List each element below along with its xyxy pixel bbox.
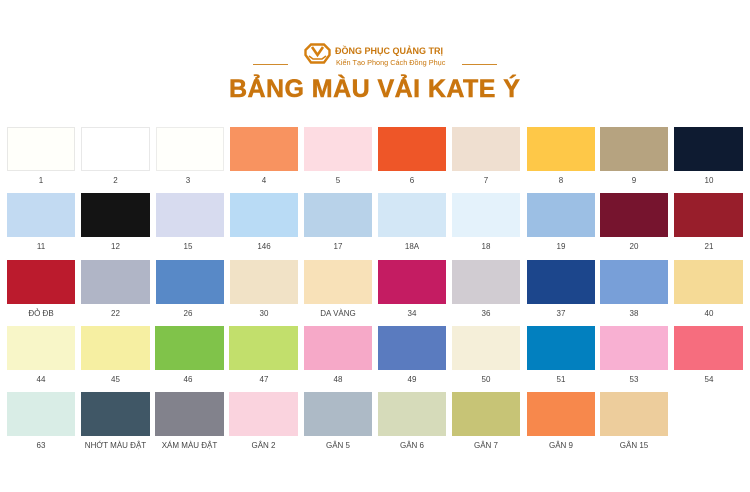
swatch 146 (230, 193, 298, 251)
swatch 21 (674, 193, 743, 251)
swatch 37 (527, 260, 595, 318)
brand tagline: Kiến Tạo Phong Cách Đồng Phục (336, 58, 445, 67)
swatch 44 (7, 326, 75, 384)
swatch DA VÀNG: DA VÀNG (320, 309, 356, 318)
swatch 38 (600, 260, 668, 318)
swatch 8 (527, 127, 595, 185)
swatch 18A: 18A (405, 242, 419, 251)
swatch 5: 5 (336, 176, 340, 185)
swatch XÁM MÀU ĐẬT: XÁM MÀU ĐẬT (162, 441, 217, 450)
swatch 45: 45 (111, 375, 120, 384)
swatch 10 (674, 127, 743, 185)
swatch GÂN 9: GÂN 9 (549, 441, 573, 450)
swatch 2 (81, 127, 150, 185)
swatch 63 (7, 392, 83, 454)
swatch 40: 40 (705, 309, 713, 318)
swatch 34 (378, 260, 446, 318)
swatch 11: 11 (37, 242, 45, 251)
swatch 47: 47 (260, 375, 268, 384)
swatch 26 (156, 260, 224, 318)
swatch GÂN 6 (378, 392, 454, 454)
swatch 36 (452, 260, 520, 318)
swatch 36: 36 (482, 309, 490, 318)
swatch 11 (7, 193, 75, 251)
swatch 30 (230, 260, 298, 318)
swatch 1 (7, 127, 75, 185)
swatch 3: 3 (186, 176, 190, 185)
swatch 18 (452, 193, 520, 251)
swatch 50: 50 (482, 375, 490, 384)
swatch GÂN 15: GÂN 15 (620, 441, 648, 450)
swatch 2: 2 (113, 176, 118, 185)
swatch 34: 34 (408, 309, 416, 318)
swatch 30: 30 (260, 309, 268, 318)
swatch NHỚT MÀU ĐẬT (81, 392, 157, 454)
brand name: ĐỒNG PHỤC QUẢNG TRỊ (335, 46, 443, 56)
swatch 44: 44 (37, 375, 45, 384)
swatch 22 (81, 260, 150, 318)
icon: brand logo (304, 43, 331, 64)
swatch 17: 17 (334, 242, 342, 251)
swatch 17 (304, 193, 372, 251)
swatch 4: 4 (262, 176, 266, 185)
swatch 10: 10 (705, 176, 713, 185)
swatch 9: 9 (632, 176, 636, 185)
swatch 51: 51 (557, 375, 565, 384)
swatch DA VÀNG (304, 260, 372, 318)
swatch ĐỎ ĐB: ĐỎ ĐB (28, 309, 54, 318)
swatch 19: 19 (557, 242, 565, 251)
title: BẢNG MÀU VẢI KATE Ý (229, 75, 520, 103)
swatch 45 (81, 326, 150, 384)
swatch 6: 6 (410, 176, 414, 185)
swatch 47 (229, 326, 298, 384)
swatch 49 (378, 326, 446, 384)
swatch GÂN 9 (527, 392, 603, 454)
swatch 19 (527, 193, 595, 251)
header rule left (253, 64, 288, 65)
swatch 53 (600, 326, 668, 384)
swatch 9 (600, 127, 668, 185)
swatch 15: 15 (184, 242, 192, 251)
swatch GÂN 5: GÂN 5 (326, 441, 350, 450)
swatch 20 (600, 193, 668, 251)
swatch 18: 18 (482, 242, 490, 251)
swatch 4 (230, 127, 298, 185)
swatch 49: 49 (408, 375, 416, 384)
swatch GÂN 15 (600, 392, 676, 454)
header rule right (462, 64, 497, 65)
swatch GÂN 7 (452, 392, 528, 454)
swatch 7: 7 (484, 176, 488, 185)
swatch XÁM MÀU ĐẬT (155, 392, 231, 454)
swatch 48 (304, 326, 372, 384)
swatch 53: 53 (630, 375, 638, 384)
swatch 18A (378, 193, 446, 251)
swatch ĐỎ ĐB (7, 260, 75, 318)
swatch 12: 12 (111, 242, 120, 251)
swatch GÂN 6: GÂN 6 (400, 441, 424, 450)
swatch 12 (81, 193, 150, 251)
swatch 20: 20 (630, 242, 638, 251)
swatch 7 (452, 127, 520, 185)
swatch 26: 26 (184, 309, 192, 318)
swatch 46 (155, 326, 224, 384)
swatch GÂN 2 (229, 392, 305, 454)
swatch 15 (156, 193, 224, 251)
swatch 48: 48 (334, 375, 342, 384)
swatch 21: 21 (705, 242, 713, 251)
swatch 54: 54 (705, 375, 713, 384)
swatch 50 (452, 326, 520, 384)
swatch 8: 8 (559, 176, 563, 185)
swatch 5 (304, 127, 372, 185)
swatch 146: 146 (257, 242, 271, 251)
swatch 6 (378, 127, 446, 185)
swatch GÂN 7: GÂN 7 (474, 441, 498, 450)
swatch 3 (156, 127, 224, 185)
swatch 46: 46 (184, 375, 192, 384)
swatch 51 (527, 326, 595, 384)
swatch NHỚT MÀU ĐẬT: NHỚT MÀU ĐẬT (85, 441, 146, 450)
swatch 40 (674, 260, 743, 318)
swatch 37: 37 (557, 309, 565, 318)
swatch 1: 1 (39, 176, 43, 185)
swatch 54 (674, 326, 750, 388)
swatch 63: 63 (37, 441, 45, 450)
swatch GÂN 5 (304, 392, 380, 454)
swatch GÂN 2: GÂN 2 (251, 441, 276, 450)
swatch 22: 22 (111, 309, 120, 318)
swatch 38: 38 (630, 309, 638, 318)
